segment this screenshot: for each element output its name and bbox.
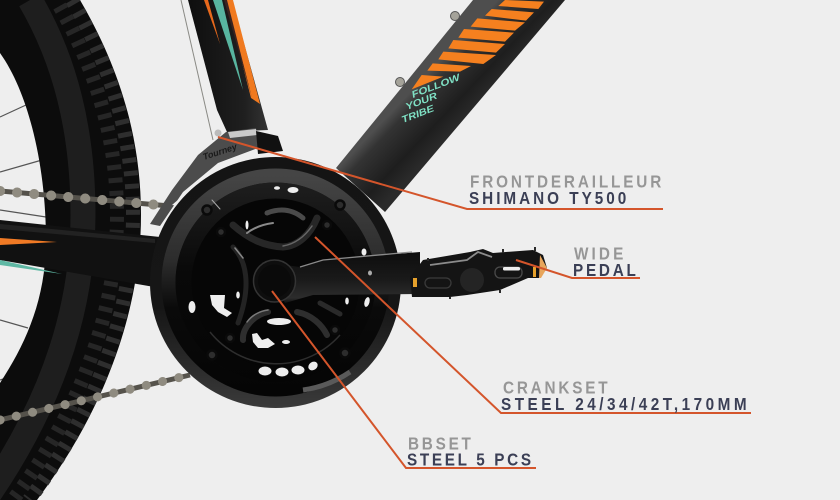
slogan: YOUR xyxy=(404,91,439,113)
leader line: bottom bracket xyxy=(272,291,536,468)
slogan xyxy=(400,72,463,126)
label: wide pedal: PEDAL xyxy=(573,260,636,280)
slogan: TRIBE xyxy=(400,103,437,126)
seat tube xyxy=(188,0,268,132)
spokes xyxy=(0,105,46,380)
label: crankset: STEEL 24/34/42T,170MM xyxy=(501,394,747,414)
leader line: pedal xyxy=(516,260,640,278)
label: crankset: CRANKSET xyxy=(503,377,608,398)
sidewall xyxy=(0,0,83,500)
brand mark: Tourney xyxy=(202,141,239,162)
pedal pins xyxy=(428,247,535,299)
label: wide pedal: WIDE xyxy=(574,243,623,264)
label: front derailleur xyxy=(469,171,661,208)
label: bottom bracket set: STEEL 5 PCS xyxy=(407,449,531,470)
label: front derailleur: FRONTDERAILLEUR xyxy=(470,171,661,192)
leader line: crankset xyxy=(315,237,751,413)
down tube xyxy=(336,0,565,212)
pedal xyxy=(410,247,547,299)
crank arm xyxy=(262,252,420,303)
brake cable xyxy=(181,0,213,140)
leader line: front derailleur xyxy=(218,137,663,209)
chainring bolts xyxy=(202,200,350,360)
label: bottom bracket set: BBSET xyxy=(408,433,472,454)
label: wide pedal xyxy=(573,243,636,280)
slogan: FOLLOW xyxy=(410,72,463,101)
label: bottom bracket set xyxy=(407,433,531,470)
chainstay tube xyxy=(0,220,160,288)
light gap xyxy=(172,186,198,206)
rear wheel tyre xyxy=(0,0,141,500)
tread knobs xyxy=(13,0,133,500)
bottom sheen xyxy=(303,372,350,390)
bottom bracket cap xyxy=(254,260,296,302)
spider arms and arcs xyxy=(212,200,340,340)
lower chain xyxy=(0,375,190,420)
chainring guard xyxy=(150,157,401,408)
orange stripe xyxy=(0,238,57,245)
clamp bolt xyxy=(214,130,222,136)
upper chain xyxy=(0,191,170,206)
teal stripe xyxy=(0,260,62,274)
orange chevron stripes xyxy=(412,0,544,89)
label: front derailleur: SHIMANO TY500 xyxy=(469,188,626,208)
front derailleur xyxy=(150,128,283,226)
chainring cut-outs xyxy=(188,186,371,376)
label: crankset xyxy=(501,377,747,414)
bolts xyxy=(396,12,460,86)
